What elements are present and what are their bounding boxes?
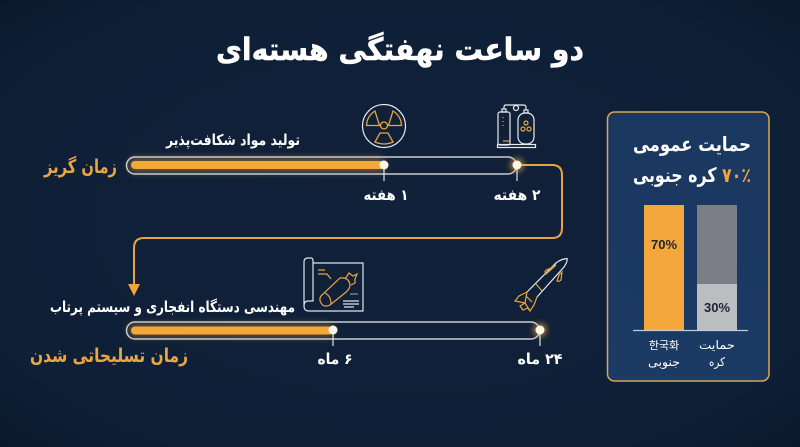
timeline: weaponization time xyxy=(30,298,562,368)
bar: South Korea 70%: 70% xyxy=(651,237,677,252)
marker: twenty-four months: ۲۴ ماه xyxy=(518,350,562,368)
axis label: Korea support xyxy=(699,338,735,370)
bar: Korea 30% xyxy=(697,205,737,330)
title: دو ساعت نهفتگی هسته‌ای xyxy=(216,31,584,68)
panel heading: ۷۰٪ کره جنوبی xyxy=(633,163,751,187)
panel: public support xyxy=(608,112,769,381)
marker: one week: ۱ هفته xyxy=(364,186,408,204)
marker: two weeks: ۲ هفته xyxy=(494,186,540,204)
icon: bomb blueprint xyxy=(304,258,363,311)
icon: enrichment tanks xyxy=(498,105,536,148)
axis label: Korea support: حمایت xyxy=(699,338,735,352)
marker: six months: ۶ ماه xyxy=(318,350,352,368)
timeline: breakout time xyxy=(43,131,541,204)
marker: two weeks xyxy=(494,158,540,204)
axis label: South Korea: جنوبی xyxy=(648,355,680,370)
marker: six months xyxy=(318,326,352,368)
bar track xyxy=(126,322,540,339)
bar glow xyxy=(128,157,386,173)
bar glow xyxy=(128,323,334,338)
panel heading xyxy=(633,132,751,187)
bar fill xyxy=(131,326,333,334)
connector arrow xyxy=(128,165,562,296)
axis label: Korea support: کره xyxy=(709,355,725,370)
label: weaponization time: زمان تسلیحاتی شدن xyxy=(30,345,188,367)
marker: twenty-four months xyxy=(518,323,562,368)
axis label: South Korea: 한국화 xyxy=(649,337,679,353)
baseline xyxy=(633,330,748,332)
bar: South Korea 70% xyxy=(644,205,684,330)
bar track xyxy=(126,157,516,174)
label: fissile material production: تولید مواد شکافت‌پذیر xyxy=(165,131,300,150)
axis label: South Korea xyxy=(648,337,680,370)
panel heading: حمایت عمومی xyxy=(633,132,751,156)
bar: Korea 30%: 30% xyxy=(704,300,730,315)
label: device engineering and launch system: مهندسی دستگاه انفجاری و سیستم پرتاب xyxy=(50,298,295,317)
label: breakout time: زمان گریز xyxy=(43,155,117,178)
icon: rocket xyxy=(515,258,567,311)
bar fill xyxy=(131,161,384,169)
marker: one week xyxy=(364,160,408,204)
icon: radiation symbol xyxy=(362,104,406,148)
